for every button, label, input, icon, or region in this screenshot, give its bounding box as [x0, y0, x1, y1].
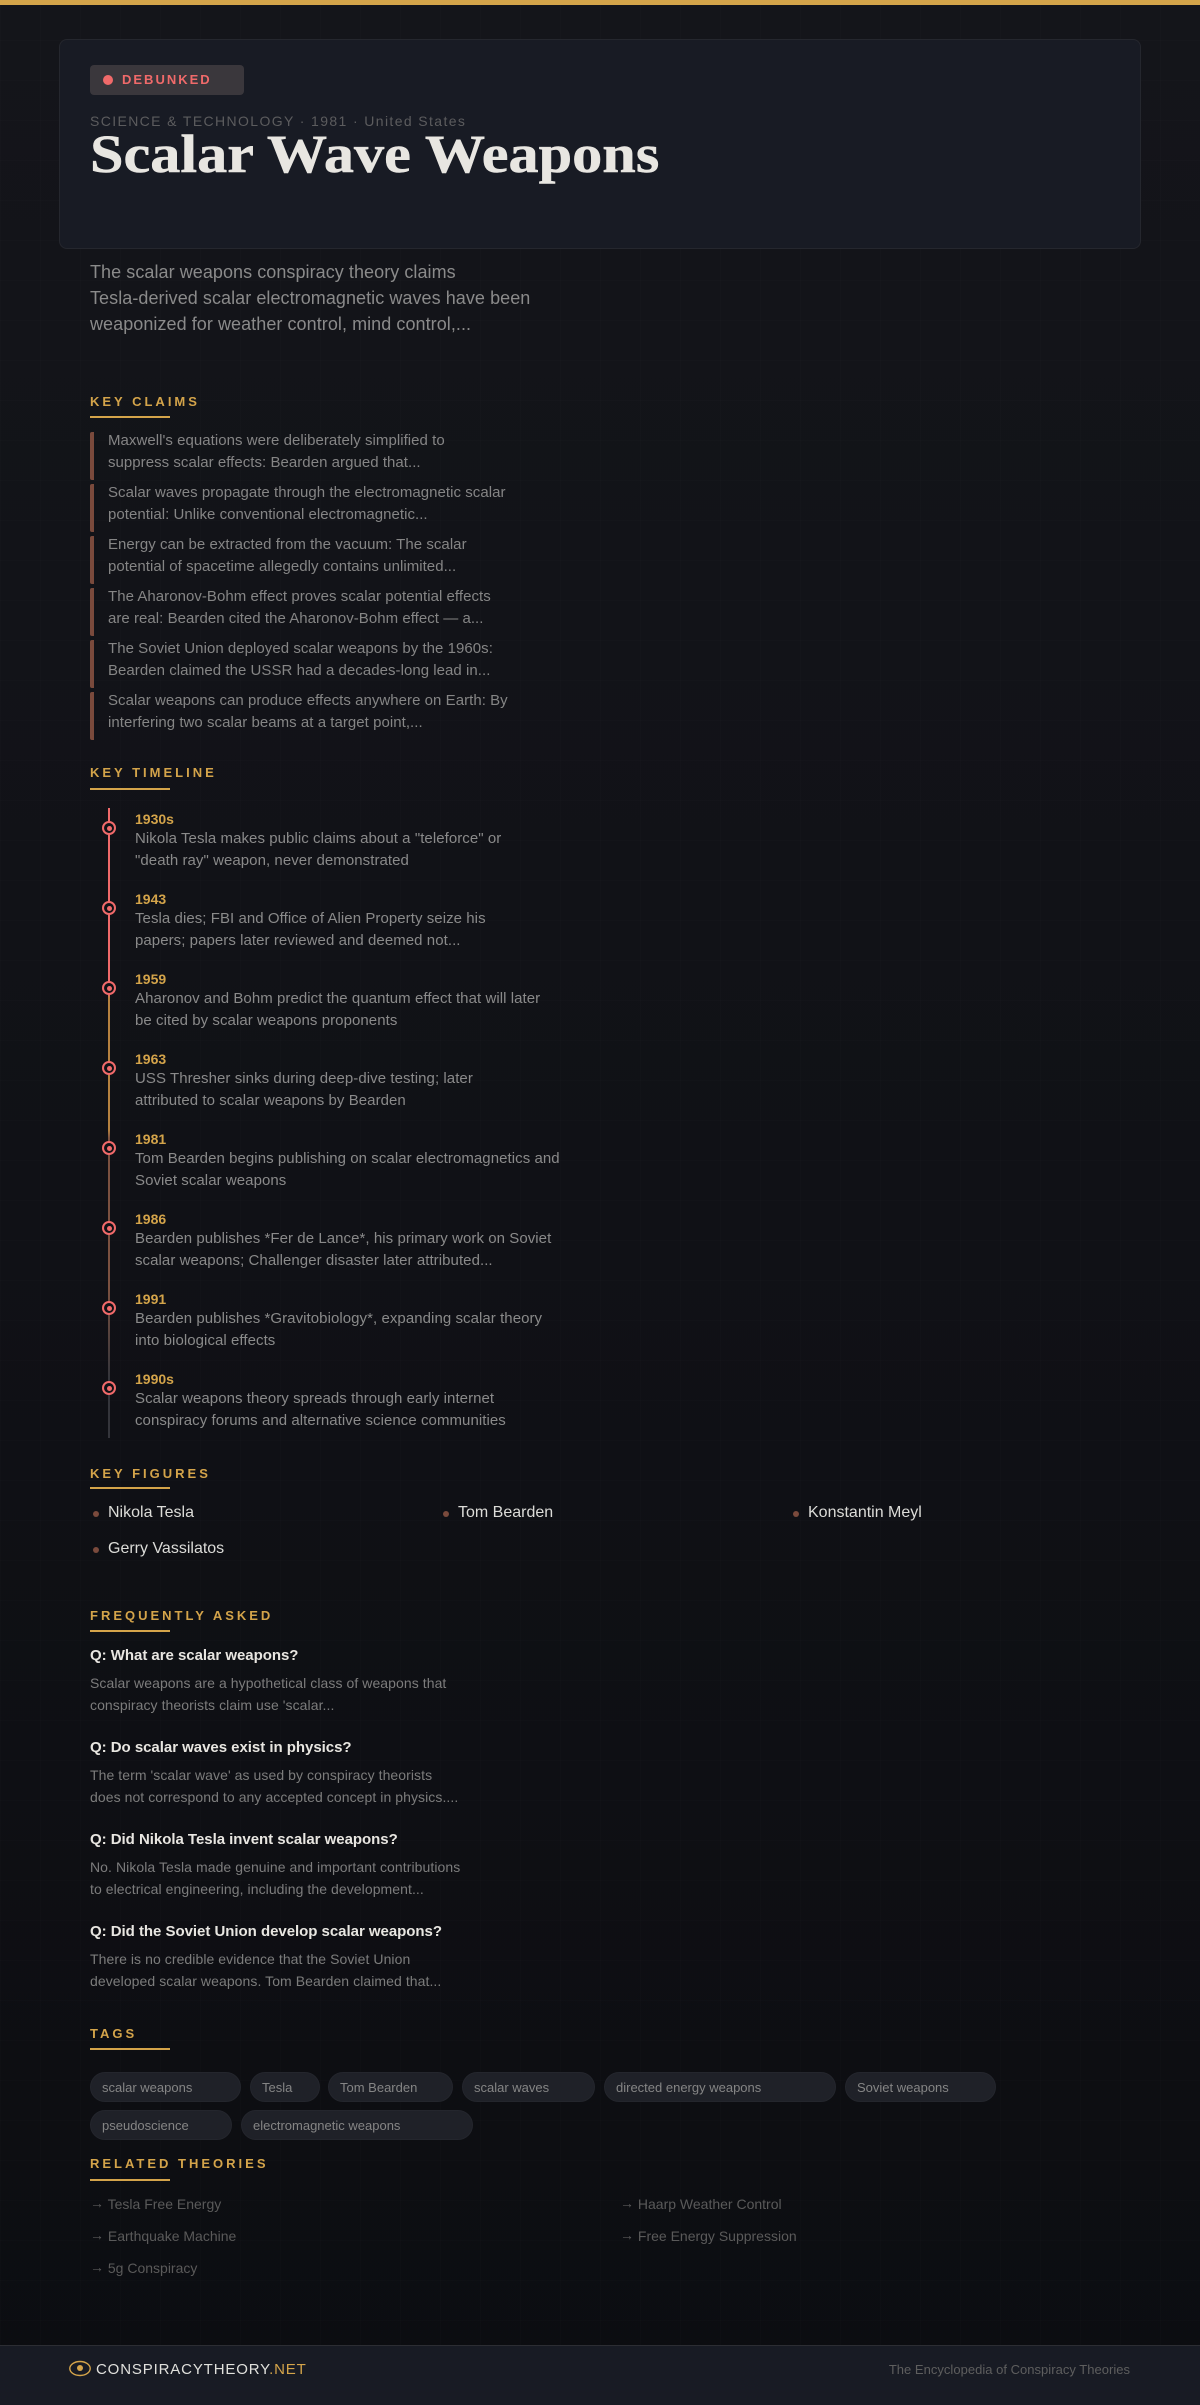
figure: Gerry Vassilatos: Gerry Vassilatos [108, 1540, 224, 1557]
claim 3: potential of spacetime allegedly contains unlimited... [108, 558, 456, 575]
event 1943: Tesla dies; FBI and Office of Alien Property seize his [135, 910, 486, 927]
panel: hero [59, 39, 1141, 249]
tag [241, 2110, 473, 2140]
event 1990s: 1990s [135, 1371, 174, 1387]
footer tagline: The Encyclopedia of Conspiracy Theories [889, 2362, 1130, 2377]
event 1943: 1943 [135, 891, 166, 907]
faq 3: to electrical engineering, including the development... [90, 1881, 424, 1897]
top accent bar [0, 0, 1200, 5]
tag [90, 2110, 232, 2140]
tag [462, 2072, 595, 2102]
heading: frequently asked: FREQUENTLY ASKED [90, 1608, 273, 1623]
tag: scalar waves [474, 2080, 549, 2095]
claim 4: are real: Bearden cited the Aharonov-Bohm effect — a... [108, 610, 483, 627]
faq 4: There is no credible evidence that the Soviet Union [90, 1951, 410, 1967]
faq 1: Scalar weapons are a hypothetical class of weapons that [90, 1675, 446, 1691]
faq 3: Q: Did Nikola Tesla invent scalar weapons? [90, 1831, 398, 1848]
claim 1: Maxwell's equations were deliberately simplified to [108, 432, 445, 449]
faq 3 [90, 1831, 460, 1897]
panel: tags [90, 2072, 996, 2140]
event 1930s: "death ray" weapon, never demonstrated [135, 852, 409, 869]
timeline axis [108, 808, 110, 1438]
tag: pseudoscience [102, 2118, 189, 2133]
panel: related theories [90, 2195, 797, 2276]
faq 4 [90, 1923, 442, 1989]
event 1990s: Scalar weapons theory spreads through early internet [135, 1390, 494, 1407]
claim 2: potential: Unlike conventional electromagnetic... [108, 506, 428, 523]
claim 4 [90, 588, 550, 636]
event 1986: Bearden publishes *Fer de Lance*, his primary work on Soviet [135, 1230, 551, 1247]
claim 2 [90, 484, 550, 532]
event 1986 [102, 1211, 552, 1269]
tag: electromagnetic weapons [253, 2118, 400, 2133]
event 1986: 1986 [135, 1211, 166, 1227]
event 1981: Soviet scalar weapons [135, 1172, 286, 1189]
claim 6: Scalar weapons can produce effects anywhere on Earth: By [108, 692, 508, 709]
link: → Tesla Free Energy [90, 2195, 221, 2212]
link: → Free Energy Suppression [620, 2227, 797, 2244]
event 1986: scalar weapons; Challenger disaster later attributed... [135, 1252, 493, 1269]
heading: tags: TAGS [90, 2026, 137, 2041]
event 1963 [102, 1051, 473, 1109]
tag: Soviet weapons [857, 2080, 949, 2095]
event 1963: 1963 [135, 1051, 166, 1067]
intro text [90, 262, 530, 334]
event 1991: Bearden publishes *Gravitobiology*, expanding scalar theory [135, 1310, 542, 1327]
claim 3 [90, 536, 550, 584]
event 1943 [102, 891, 486, 949]
claim 4: The Aharonov-Bohm effect proves scalar potential effects [108, 588, 491, 605]
intro text: Tesla-derived scalar electromagnetic waves have been [90, 288, 530, 308]
event 1963: USS Thresher sinks during deep-dive testing; later [135, 1070, 473, 1087]
panel: key claims list [90, 432, 508, 740]
event 1981: 1981 [135, 1131, 166, 1147]
link: → Earthquake Machine [90, 2227, 236, 2244]
heading: related theories: RELATED THEORIES [90, 2156, 268, 2171]
event 1959: Aharonov and Bohm predict the quantum effect that will later [135, 990, 540, 1007]
event 1930s: Nikola Tesla makes public claims about a "teleforce" or [135, 830, 501, 847]
claim 5: The Soviet Union deployed scalar weapons by the 1960s: [108, 640, 493, 657]
event 1991: into biological effects [135, 1332, 275, 1349]
figure: Konstantin Meyl: Konstantin Meyl [808, 1504, 922, 1521]
heading: key figures: KEY FIGURES [90, 1466, 211, 1481]
claim 6: interfering two scalar beams at a target point,... [108, 714, 423, 731]
claim 1: suppress scalar effects: Bearden argued that... [108, 454, 421, 471]
claim 2: Scalar waves propagate through the electromagnetic scalar [108, 484, 506, 501]
heading: key timeline: KEY TIMELINE [90, 765, 217, 780]
faq 2: The term 'scalar wave' as used by conspiracy theorists [90, 1767, 432, 1783]
event 1990s: conspiracy forums and alternative science communities [135, 1412, 506, 1429]
faq 3: No. Nikola Tesla made genuine and important contributions [90, 1859, 460, 1875]
faq 2 [90, 1739, 458, 1805]
panel: FAQ [90, 1647, 460, 1989]
intro text: The scalar weapons conspiracy theory claims [90, 262, 456, 282]
link: → 5g Conspiracy [90, 2259, 197, 2276]
faq 1: Q: What are scalar weapons? [90, 1647, 298, 1664]
footer [0, 2345, 1200, 2405]
icon: status dot [103, 75, 113, 85]
tag [328, 2072, 453, 2102]
title: Scalar Wave Weapons [90, 124, 659, 184]
badge label: DEBUNKED [122, 72, 212, 87]
figure: Tom Bearden: Tom Bearden [458, 1504, 553, 1521]
event 1990s [102, 1371, 506, 1429]
panel: key figures [93, 1504, 922, 1557]
event 1991: 1991 [135, 1291, 166, 1307]
claim 3: Energy can be extracted from the vacuum: The scalar [108, 536, 467, 553]
panel: timeline [102, 808, 560, 1438]
event 1981: Tom Bearden begins publishing on scalar electromagnetics and [135, 1150, 560, 1167]
meta line: SCIENCE & TECHNOLOGY · 1981 · United States [90, 113, 466, 129]
intro text: weaponized for weather control, mind control,... [90, 314, 471, 334]
event 1991 [102, 1291, 542, 1349]
figure: Nikola Tesla: Nikola Tesla [108, 1504, 194, 1521]
faq 4: Q: Did the Soviet Union develop scalar weapons? [90, 1923, 442, 1940]
event 1959: be cited by scalar weapons proponents [135, 1012, 397, 1029]
event 1943: papers; papers later reviewed and deemed not... [135, 932, 461, 949]
claim 1 [90, 432, 550, 480]
tag [604, 2072, 836, 2102]
event 1981 [102, 1131, 560, 1189]
footer logo wordmark: CONSPIRACYTHEORY.NET [96, 2361, 307, 2378]
tag: scalar weapons [102, 2080, 192, 2095]
tag [90, 2072, 241, 2102]
heading: key claims: KEY CLAIMS [90, 394, 200, 409]
faq 2: does not correspond to any accepted concept in physics.... [90, 1789, 458, 1805]
event 1930s [102, 811, 501, 869]
claim 5: Bearden claimed the USSR had a decades-long lead in... [108, 662, 490, 679]
link: → Haarp Weather Control [620, 2195, 782, 2212]
claim 6 [90, 692, 550, 740]
tag: directed energy weapons [616, 2080, 761, 2095]
faq 1 [90, 1647, 446, 1713]
faq 4: developed scalar weapons. Tom Bearden claimed that... [90, 1973, 441, 1989]
event 1959 [102, 971, 540, 1029]
tag: Tesla [262, 2080, 292, 2095]
tag [250, 2072, 320, 2102]
icon: eye logo [69, 2360, 91, 2376]
event 1959: 1959 [135, 971, 166, 987]
tag: Tom Bearden [340, 2080, 417, 2095]
claim 5 [90, 640, 550, 688]
faq 2: Q: Do scalar waves exist in physics? [90, 1739, 352, 1756]
badge: debunked [90, 65, 244, 95]
event 1963: attributed to scalar weapons by Bearden [135, 1092, 406, 1109]
faq 1: conspiracy theorists claim use 'scalar... [90, 1697, 334, 1713]
event 1930s: 1930s [135, 811, 174, 827]
tag [845, 2072, 996, 2102]
